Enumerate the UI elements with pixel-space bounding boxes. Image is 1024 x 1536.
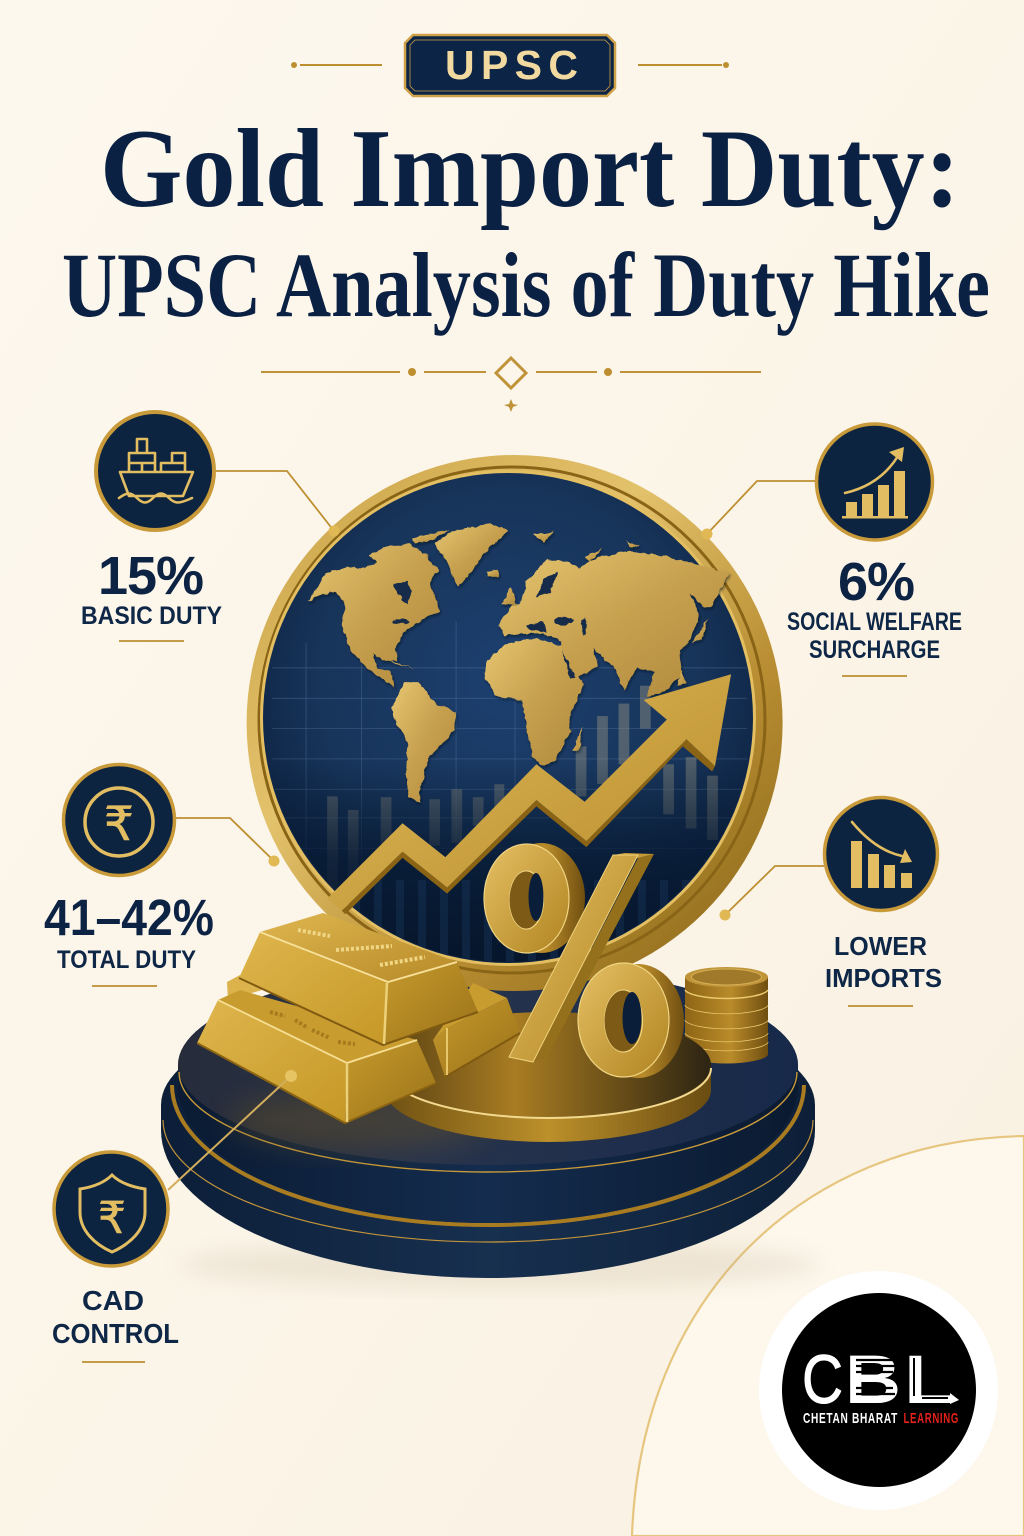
stat: 15%: 15% xyxy=(98,546,204,606)
connector line xyxy=(215,471,334,531)
label: basic duty: BASIC DUTY xyxy=(81,602,222,630)
second ring xyxy=(578,963,684,1078)
gold bar: lower xyxy=(197,990,436,1123)
connector line xyxy=(168,1076,291,1190)
rising arrow xyxy=(327,674,731,914)
stat: 41–42%: 41–42% xyxy=(44,889,214,946)
logo: Chetan Bharat Learning xyxy=(759,1271,998,1510)
logo: Chetan Bharat Learning: C xyxy=(802,1341,843,1418)
callout: CAD control xyxy=(52,1070,297,1362)
logo: Chetan Bharat Learning: B xyxy=(845,1341,901,1418)
first ring xyxy=(484,843,585,953)
connector line xyxy=(175,818,274,861)
callout: social welfare surcharge xyxy=(702,424,962,676)
globe medallion xyxy=(247,455,783,991)
label: CAD control: CONTROL xyxy=(52,1318,179,1349)
title divider ornament xyxy=(261,358,761,412)
gold bar: upper xyxy=(239,913,478,1045)
decorative corner arc xyxy=(632,1136,1024,1536)
coin stack xyxy=(685,967,768,1063)
platform shadow xyxy=(180,1241,820,1289)
callout: basic duty xyxy=(81,412,340,641)
connector line xyxy=(707,481,816,534)
title: Gold Import Duty: xyxy=(100,107,960,231)
percent sign xyxy=(484,843,684,1078)
label: lower imports: LOWER xyxy=(834,931,927,961)
logo: Chetan Bharat Learning: L xyxy=(904,1341,954,1418)
label: lower imports xyxy=(825,931,942,993)
title xyxy=(62,107,990,336)
gold podium disc xyxy=(385,1012,711,1142)
label: social welfare surcharge: SOCIAL WELFARE xyxy=(787,608,962,636)
icon: rupee shield xyxy=(54,1152,168,1266)
label: CAD control xyxy=(52,1285,179,1349)
stat: 6%: 6% xyxy=(838,552,915,612)
callout: total duty xyxy=(44,764,280,986)
callout: lower imports xyxy=(720,798,942,1006)
label: social welfare surcharge: SURCHARGE xyxy=(809,636,940,664)
icon: falling chart xyxy=(824,798,938,910)
map inner seas xyxy=(393,571,587,679)
gold bar: rear xyxy=(227,975,520,1077)
world map xyxy=(307,524,730,802)
icon: growth chart xyxy=(816,424,932,540)
label: CAD control: CAD xyxy=(82,1285,144,1316)
platform base xyxy=(161,965,815,1278)
icon: rupee coin: ₹ xyxy=(104,797,134,852)
icon: rupee shield: ₹ xyxy=(98,1193,126,1244)
label: lower imports: IMPORTS xyxy=(825,963,942,993)
logo: Chetan Bharat Learning: CHETAN BHARAT xyxy=(803,1410,898,1427)
central illustration xyxy=(161,455,815,1278)
icon: cargo ship xyxy=(96,412,214,530)
chart grid and bars xyxy=(272,622,748,962)
connector line xyxy=(725,866,824,915)
header badge: UPSC: UPSC xyxy=(445,42,578,88)
logo: Chetan Bharat Learning: LEARNING xyxy=(904,1410,959,1427)
icon: rupee coin xyxy=(64,764,174,876)
slash xyxy=(509,853,654,1062)
header badge: UPSC xyxy=(291,35,729,96)
label: social welfare surcharge xyxy=(787,608,962,664)
label: total duty: TOTAL DUTY xyxy=(57,946,196,974)
